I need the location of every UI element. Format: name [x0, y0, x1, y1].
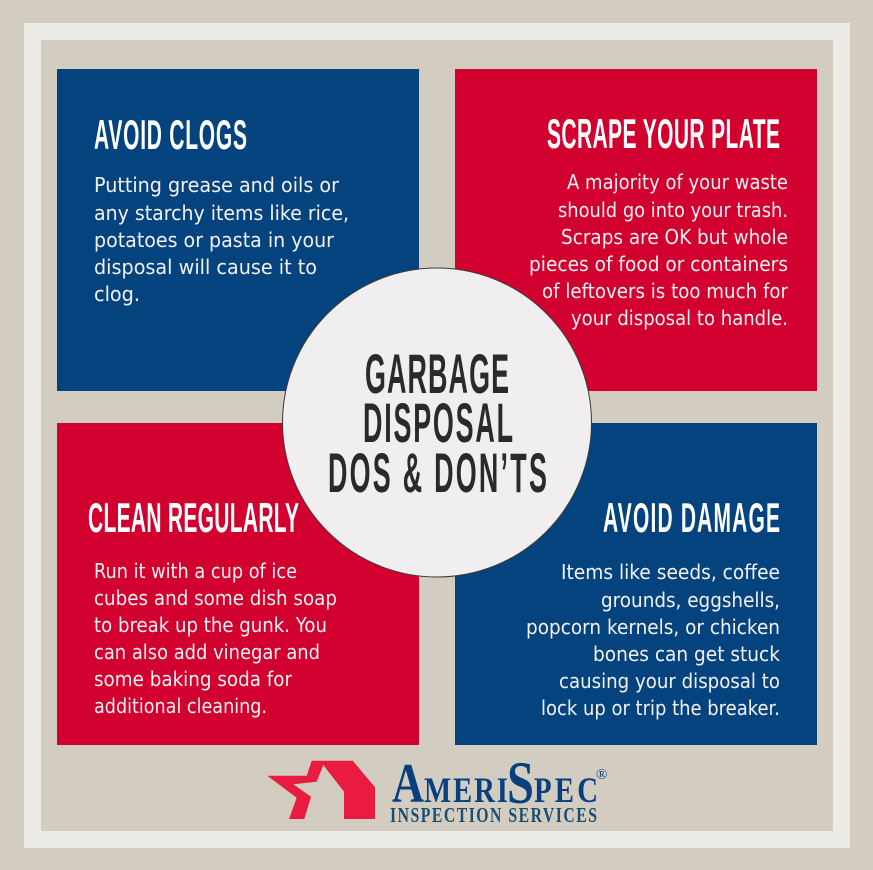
text block: clean regularly body: Run it with a cup of ice — [94, 559, 297, 583]
text block: clean regularly body: cubes and some dish soap — [94, 586, 337, 610]
text block: clean regularly body — [94, 559, 337, 718]
text block: clean regularly body: to break up the gunk. You — [94, 613, 327, 637]
panel: scrape your plate — [455, 69, 817, 391]
text block: avoid damage body: causing your disposal to — [559, 669, 780, 693]
title: DOS & DON’TS — [328, 442, 547, 505]
text block: avoid clogs body: Putting grease and oils or — [94, 173, 340, 197]
logo wordmark: ® — [596, 767, 607, 783]
heading: avoid clogs: AVOID CLOGS — [94, 112, 247, 159]
panel: avoid clogs — [57, 69, 419, 391]
text block: avoid damage body: grounds, eggshells, — [601, 588, 780, 612]
text block: scrape your plate body: pieces of food or containers — [529, 252, 788, 276]
title — [328, 343, 547, 505]
heading: clean regularly: CLEAN REGULARLY — [88, 495, 299, 542]
text block: avoid damage body: Items like seeds, coffee — [561, 560, 780, 584]
icon: red star house — [267, 761, 375, 819]
text block: scrape your plate body: A majority of your waste — [567, 170, 788, 194]
text block: avoid damage body — [526, 560, 780, 720]
text block: avoid damage body: popcorn kernels, or chicken — [526, 615, 780, 639]
title: GARBAGE — [365, 343, 509, 406]
logo: AmeriSpec Inspection Services — [267, 750, 607, 828]
text block: clean regularly body: some baking soda for — [94, 667, 293, 691]
text block: avoid clogs body — [94, 173, 349, 306]
title: DISPOSAL — [363, 392, 513, 455]
text block: scrape your plate body — [529, 170, 789, 330]
center circle with title — [282, 268, 592, 577]
text block: avoid damage body: lock up or trip the breaker. — [541, 696, 780, 720]
panel: clean regularly — [57, 423, 419, 745]
panel: avoid damage — [455, 423, 817, 745]
heading: avoid damage: AVOID DAMAGE — [603, 495, 780, 542]
text block: avoid damage body: bones can get stuck — [593, 642, 780, 666]
text block: avoid clogs body: potatoes or pasta in your — [94, 228, 335, 252]
text block: clean regularly body: can also add vinegar and — [94, 640, 320, 664]
text block: avoid clogs body: disposal will cause it to — [94, 255, 317, 279]
logo wordmark — [390, 750, 607, 828]
logo wordmark: MERI — [424, 771, 508, 811]
text block: avoid clogs body: any starchy items like rice, — [94, 201, 349, 225]
logo wordmark: S — [507, 750, 534, 816]
text block: scrape your plate body: Scraps are OK but whole — [561, 225, 788, 249]
text block: scrape your plate body: should go into your trash. — [558, 198, 788, 222]
heading: scrape your plate: SCRAPE YOUR PLATE — [547, 111, 780, 158]
text block: clean regularly body: additional cleaning. — [94, 694, 267, 718]
logo wordmark: PEC — [534, 771, 598, 811]
text block: scrape your plate body: of leftovers is too much for — [542, 279, 789, 303]
text block: avoid clogs body: clog. — [94, 282, 140, 306]
logo wordmark: INSPECTION SERVICES — [390, 804, 597, 828]
text block: scrape your plate body: your disposal to handle. — [571, 306, 788, 330]
logo wordmark: A — [392, 753, 424, 815]
